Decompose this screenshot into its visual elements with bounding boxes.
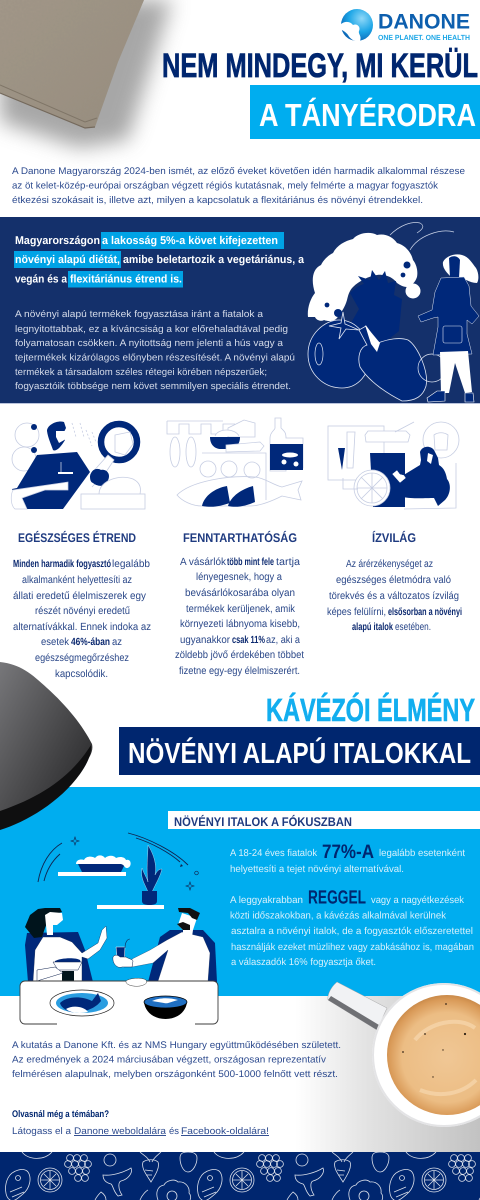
research note xyxy=(12,1040,341,1080)
column 2 text: környezeti lábnyoma kisebb, xyxy=(180,619,300,630)
intro text xyxy=(12,166,465,206)
further reading xyxy=(12,1109,269,1137)
further reading: Facebook-oldalára! xyxy=(181,1126,269,1137)
further reading: Danone weboldalára xyxy=(74,1126,167,1137)
further reading: és xyxy=(169,1126,179,1137)
column 2 text: lényegesnek, hogy a xyxy=(196,572,282,583)
woman xyxy=(25,908,107,982)
column 2 heading: FENNTARTHATÓSÁG xyxy=(183,530,297,545)
stat: morning: REGGEL xyxy=(308,888,366,908)
illustration: vegetables and woman xyxy=(308,222,479,402)
column 1 text: állati eredetű élelmiszerek egy xyxy=(13,591,147,602)
column 2 text: zöldebb jövő érdekében többet xyxy=(175,650,304,661)
stat: 77%: 77%-A xyxy=(322,841,374,863)
column 3 text: Az árérzékenységet az xyxy=(346,559,433,570)
further reading: Olvasnál még a témában? xyxy=(12,1109,109,1120)
column 1: healthy diet xyxy=(13,530,151,680)
shelf with bowl xyxy=(58,855,131,876)
column 1 text: esetek xyxy=(41,637,70,648)
column 1 text: egészségmegőrzéshez xyxy=(35,653,129,664)
column 2 text: termékek kerüljenek, amik xyxy=(186,604,296,615)
column 1 text: 46%-ában xyxy=(71,637,110,648)
column 3 text xyxy=(327,559,462,633)
stat text block: asztalra a növényi italok, de a fogyasztók előszeretettel xyxy=(231,926,473,937)
further reading: Látogass el a xyxy=(12,1126,72,1137)
stat text block: közti időszakokban, a kávézás alkalmával kerülnek xyxy=(230,910,446,922)
title line 2 box xyxy=(250,85,480,139)
panel body text: fogyasztóik többsége nem követ semmilyen speciális étrendet. xyxy=(15,381,291,392)
stat text block: a válaszadók 16% fogyasztja őket. xyxy=(231,957,376,968)
column 3: taste xyxy=(327,530,462,633)
column 2 text: tartja xyxy=(276,557,300,568)
stat text block: használják ezeket müzlihez vagy zabkásához is, magában xyxy=(231,942,474,953)
stat text block xyxy=(230,841,474,968)
stat text block: A leggyakrabban xyxy=(230,895,303,906)
column 1 text: legalább xyxy=(112,559,150,570)
column 1 text: alternatívákkal. Ennek indoka az xyxy=(13,622,151,633)
black bowl photo xyxy=(0,662,92,830)
stat text block: vagy a nagyétkezések xyxy=(371,895,464,906)
footer food pattern xyxy=(0,1152,480,1200)
panel body text: tejtermékek kizárólagos előnyben részesítését. A növényi alapú xyxy=(15,352,295,364)
icon: man eating healthy xyxy=(11,422,145,509)
column 2 text: bevásárlókosarába olyan xyxy=(185,588,295,599)
panel heading with highlights: vegán és a xyxy=(15,274,68,286)
stat text block: A 18-24 éves fiatalok xyxy=(230,848,317,859)
column 1 text xyxy=(13,559,151,680)
column 1 text: részét növényi eredetű xyxy=(35,606,130,617)
intro text: A Danone Magyarország 2024-ben ismét, az előző éveket követően idén harmadik alkalommal részese xyxy=(12,166,465,177)
logo tagline: ONE PLANET. ONE HEALTH xyxy=(378,33,470,42)
section title box: plant-based drinks xyxy=(119,727,480,775)
panel body text: A növényi alapú termékek fogyasztása iránt a fiatalok a xyxy=(15,309,264,320)
research note: A kutatás a Danone Kft. és az NMS Hungary együttműködésében született. xyxy=(12,1040,341,1051)
panel heading with highlights: Magyarországon xyxy=(15,235,100,247)
icon: drink and woman xyxy=(328,422,459,509)
column 1 text: kapcsolódik. xyxy=(55,669,108,680)
man xyxy=(113,908,217,982)
panel body text: folyamatosan csökken. A nyitottság nem jelenti a hús vagy a xyxy=(15,338,284,349)
stat text block: helyettesíti a tejet növényi alternatívával. xyxy=(230,864,404,875)
column 2 text xyxy=(175,557,304,677)
panel heading with highlights: amibe beletartozik a vegetáriánus, a xyxy=(123,254,305,266)
Danone logo xyxy=(340,9,470,42)
column 1 text: Minden harmadik fogyasztó xyxy=(13,559,111,570)
panel heading with highlights: növényi alapú diétát, xyxy=(15,254,120,266)
panel body text: legnyitottabbak, ez a kíváncsiság a kor előrehaladtával pedig xyxy=(15,324,288,335)
intro text: az öt kelet-közép-európai országban végzett régiós kutatásnak, mely felmérte a magyar fogyasztók xyxy=(12,180,438,192)
logo wordmark: DANONE xyxy=(378,10,470,34)
column 1 text: az xyxy=(112,637,122,648)
panel heading with highlights: flexitáriánus étrend is. xyxy=(70,274,182,286)
research note: felmérésen alapulnak, melyben országonként 500-1000 felnőtt vett részt. xyxy=(12,1069,338,1080)
panel body text xyxy=(15,309,295,392)
column 3 text: esetében. xyxy=(395,622,431,633)
column 2 text: fizetne egy-egy élelmiszerért. xyxy=(179,666,300,677)
pepper xyxy=(359,326,427,401)
stat text block: legalább esetenként xyxy=(379,848,465,859)
column 2: sustainability xyxy=(175,530,304,677)
panel heading with highlights xyxy=(14,232,305,288)
illustration: couple at the table xyxy=(20,833,218,1026)
column 1 text: alkalmanként helyettesíti az xyxy=(22,575,132,586)
column 2 text: az, aki a xyxy=(266,635,300,646)
napkin photo xyxy=(0,0,172,148)
column 3 heading: ÍZVILÁG xyxy=(372,530,416,545)
column 3 text: alapú italok xyxy=(352,622,393,633)
icon: sustainable food collage xyxy=(167,418,303,507)
focus heading xyxy=(168,811,480,829)
column 1 heading: EGÉSZSÉGES ÉTREND xyxy=(18,530,136,545)
column 2 text: több mint fele xyxy=(227,557,274,568)
table with dishes xyxy=(20,978,218,1026)
panel: plant-based diet xyxy=(0,217,480,404)
panel heading with highlights: a lakosság 5%-a követ kifejezetten xyxy=(102,235,278,247)
column 3 text: egészséges életmódra való xyxy=(336,575,451,586)
column 2 text: ugyanakkor xyxy=(180,635,230,646)
intro text: étkezési szokásait is, illetve azt, milyen a kapcsolatuk a flexitáriánus és növényi étrendekkel. xyxy=(12,195,423,206)
column 2 text: csak 11% xyxy=(232,635,265,646)
broccoli xyxy=(308,233,417,321)
blue band xyxy=(0,787,480,996)
logo globe xyxy=(340,9,373,41)
shelf with plant xyxy=(97,845,164,909)
column 2 text: A vásárlók xyxy=(180,557,227,568)
woman xyxy=(406,254,479,402)
coffee cup photo xyxy=(295,982,480,1152)
tomato xyxy=(308,320,370,388)
focus heading: NÖVÉNYI ITALOK A FÓKUSZBAN xyxy=(174,814,352,829)
column 3 text: képes felülírni, xyxy=(327,607,386,618)
column 3 text: törekvés és a változatos ízvilág xyxy=(329,591,459,602)
panel body text: termékek a társadalom széles rétegei körében népszerűek; xyxy=(15,367,267,378)
research note: Az eredmények a 2024 márciusában végzett, országosan reprezentatív xyxy=(12,1054,326,1066)
